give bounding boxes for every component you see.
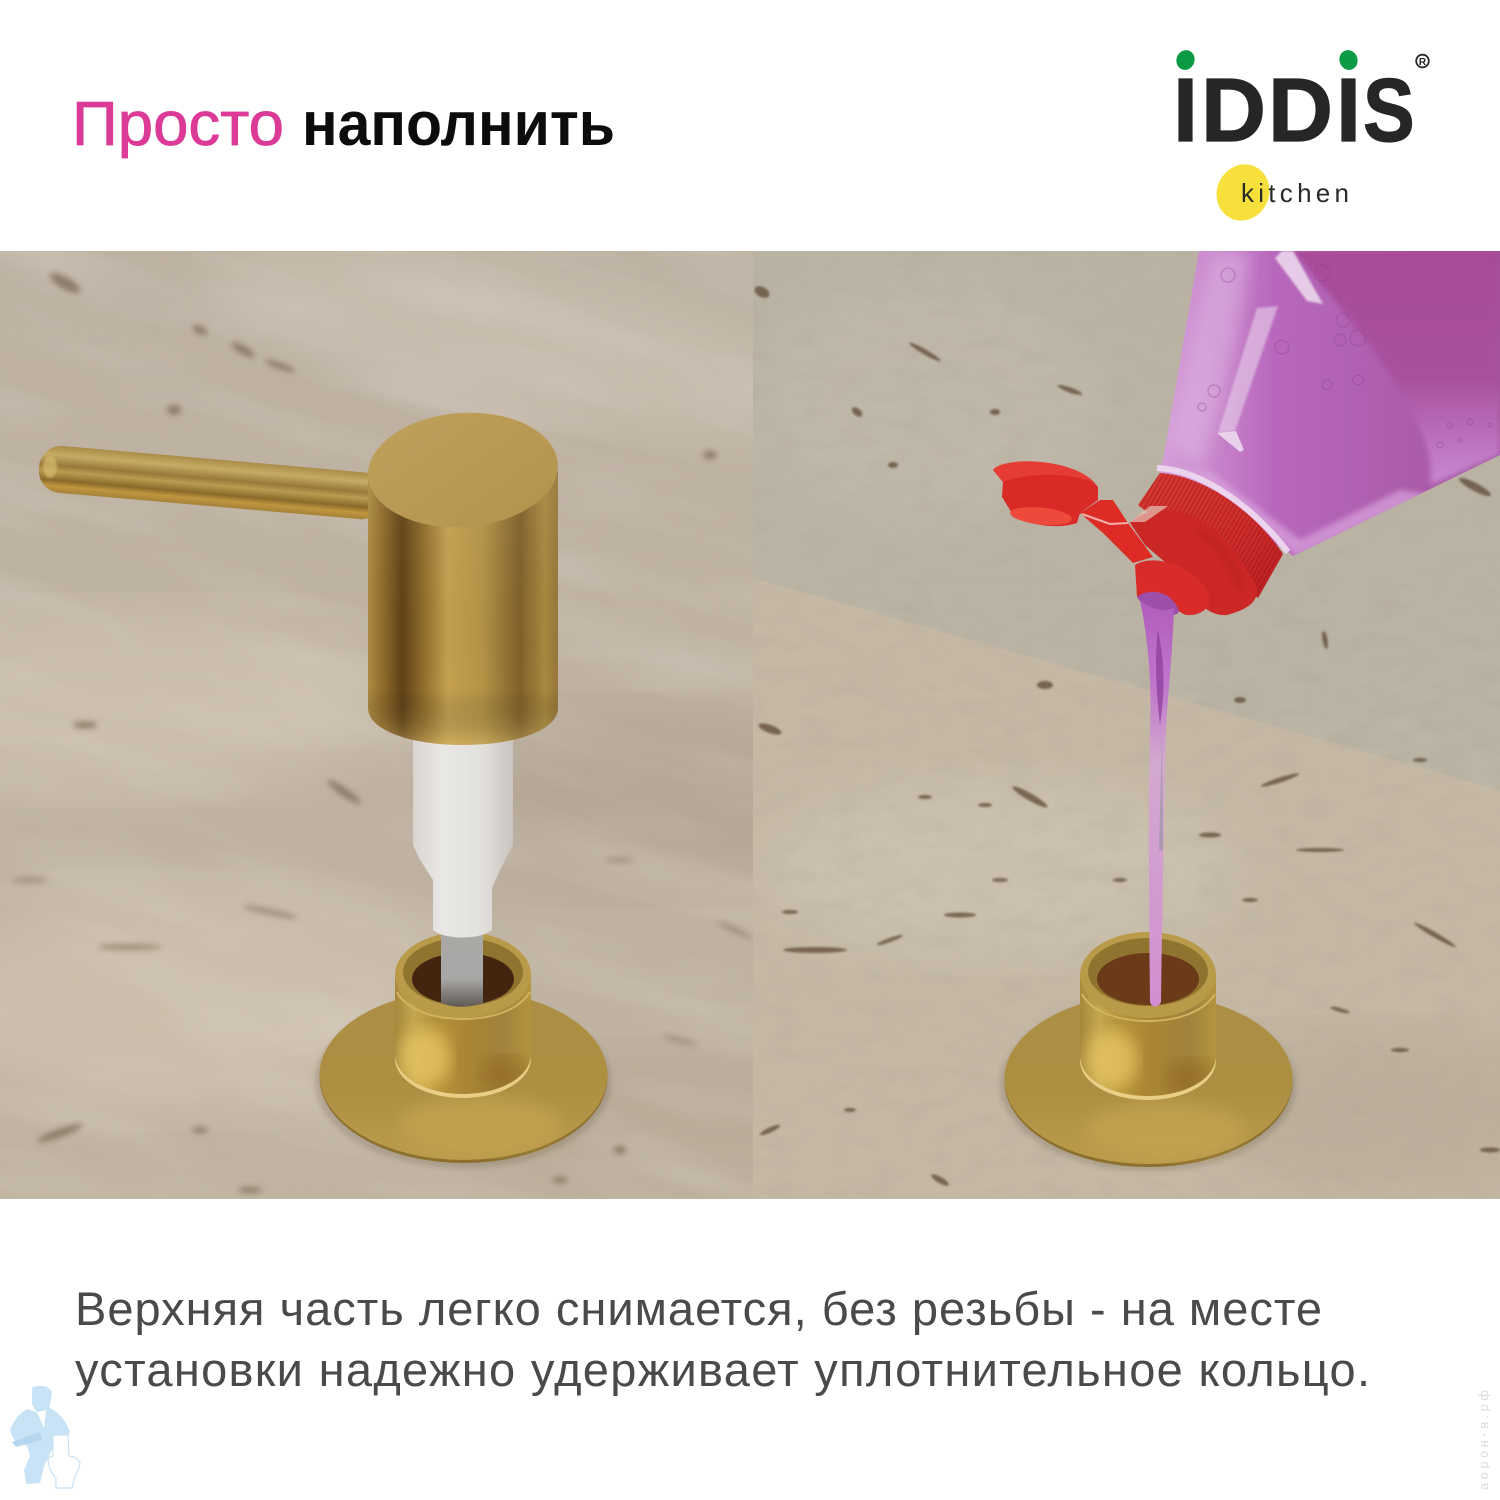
title main word: наполнить <box>302 90 615 159</box>
soap bottle <box>1150 251 1500 571</box>
toilet <box>48 1435 80 1488</box>
plumber figure <box>10 1386 70 1484</box>
logo registered mark <box>1416 55 1429 68</box>
watermark: vertical site address: аорон-я.рф <box>1476 1390 1491 1490</box>
left photo panel: soap dispenser assembled <box>0 251 753 1199</box>
left pump head cylinder <box>364 407 562 745</box>
bottle neck ring <box>1157 468 1288 552</box>
logo wordmark: IDDI <box>1173 61 1361 161</box>
watermark: plumber mascot <box>10 1386 80 1488</box>
description text <box>75 1282 1370 1396</box>
soap stream <box>1140 600 1174 1006</box>
right stone surface <box>753 251 1500 1199</box>
left white pump stem <box>413 730 513 938</box>
left flange shadow <box>314 1040 612 1170</box>
flipped cap lid <box>993 461 1098 528</box>
left stone surface <box>0 251 753 1199</box>
description line 2: установки надежно удерживает уплотнительное кольцо. <box>75 1343 1370 1396</box>
left mounting sleeve <box>395 932 531 1098</box>
title <box>72 90 615 159</box>
left pump lever <box>37 444 386 521</box>
right base flange <box>1004 994 1292 1167</box>
red cap <box>1080 473 1283 616</box>
left grey inner tube <box>441 925 483 1007</box>
plumber shirt <box>37 1410 46 1428</box>
logo yellow blob <box>1207 156 1279 229</box>
logo registered mark: R <box>1419 57 1427 68</box>
left base flange <box>320 990 608 1163</box>
description line 1: Верхняя часть легко снимается, без резьбы - на месте <box>75 1282 1322 1335</box>
logo: IDDIS kitchen <box>1173 48 1429 229</box>
right photo panel: refilling through the sleeve <box>753 251 1500 1199</box>
logo wordmark final letter: S <box>1363 60 1415 160</box>
logo green dots <box>1174 48 1360 72</box>
logo kitchen label: kitchen <box>1241 178 1349 208</box>
right mounting sleeve <box>1080 932 1216 1100</box>
title accent word: Просто <box>72 90 284 159</box>
right flange shadow <box>1000 999 1296 1171</box>
